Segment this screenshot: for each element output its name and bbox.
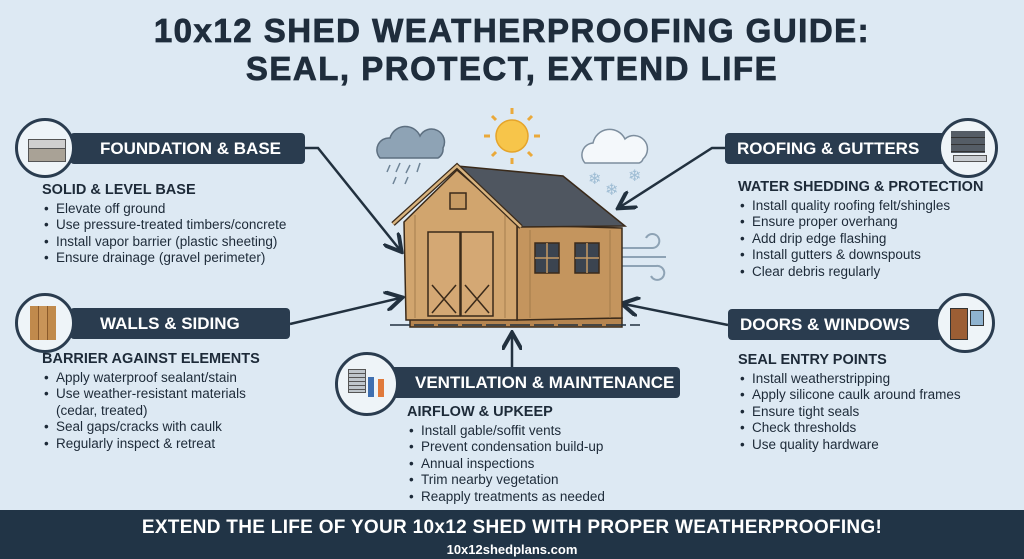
panel: foundation & base (15, 118, 305, 265)
text: ventilation bullets: Install gable/soffit vents (421, 423, 561, 438)
icon: wood and brush (15, 293, 75, 353)
footer: EXTEND THE LIFE OF YOUR 10x12 SHED WITH PROPER WEATHERPROOFING! (142, 517, 882, 538)
banner: foundation: FOUNDATION & BASE (100, 139, 281, 158)
title: 10x12 SHED WEATHERPROOFING GUIDE: (154, 12, 870, 49)
text: walls bullets: Regularly inspect & retreat (56, 436, 215, 451)
text: doors bullets: Check thresholds (752, 420, 856, 435)
text: foundation bullets: Ensure drainage (gravel perimeter) (56, 250, 265, 265)
text: foundation bullets: Elevate off ground (56, 201, 165, 216)
title (154, 12, 870, 87)
text: walls bullets: (cedar, treated) (56, 403, 148, 418)
arrows (290, 148, 728, 367)
text: roofing bullets: Ensure proper overhang (752, 214, 898, 229)
text: roofing bullets: Install gutters & downspouts (752, 247, 921, 262)
banner: ventilation (385, 367, 680, 398)
icon: door (935, 293, 995, 353)
banner: walls (70, 308, 290, 339)
icon: rain cloud (377, 126, 444, 184)
text: walls bullets: BARRIER AGAINST ELEMENTS (42, 351, 260, 367)
panel: walls & siding (15, 293, 290, 451)
panel: doors & windows (728, 293, 995, 452)
text: doors bullets: Ensure tight seals (752, 404, 859, 419)
text: doors bullets: SEAL ENTRY POINTS (738, 352, 887, 368)
icon: snow cloud: ❄ (588, 171, 601, 188)
text: roofing bullets (738, 179, 983, 279)
icon: snow cloud: ❄ (605, 182, 618, 199)
banner: walls: WALLS & SIDING (100, 314, 240, 333)
footer (0, 510, 1024, 559)
banner: roofing (725, 133, 955, 164)
banner: ventilation: VENTILATION & MAINTENANCE (415, 373, 674, 392)
banner: foundation (70, 133, 305, 164)
text: walls bullets: Seal gaps/cracks with caulk (56, 419, 222, 434)
text: walls bullets (42, 351, 260, 451)
icon: concrete slab (15, 118, 75, 178)
text: walls bullets: Apply waterproof sealant/stain (56, 370, 237, 385)
text: ventilation bullets (407, 404, 605, 504)
icon: shingles (938, 118, 998, 178)
text: walls bullets: Use weather-resistant materials (56, 386, 246, 401)
text: foundation bullets: Install vapor barrier (plastic sheeting) (56, 234, 277, 249)
shed (393, 166, 625, 327)
text: ventilation bullets: Reapply treatments as needed (421, 489, 605, 504)
banner: doors: DOORS & WINDOWS (740, 315, 910, 334)
panel: ventilation & maintenance (335, 352, 680, 504)
icon: wind (618, 234, 666, 280)
text: ventilation bullets: Prevent condensation build-up (421, 439, 603, 454)
text: roofing bullets: Install quality roofing felt/shingles (752, 198, 950, 213)
text: roofing bullets: Add drip edge flashing (752, 231, 886, 246)
text: doors bullets: Use quality hardware (752, 437, 879, 452)
text: roofing bullets: WATER SHEDDING & PROTECTION (738, 179, 983, 195)
icon: vent and tools (335, 352, 399, 416)
text: ventilation bullets: AIRFLOW & UPKEEP (407, 404, 553, 420)
text: roofing bullets: Clear debris regularly (752, 264, 880, 279)
banner: roofing: ROOFING & GUTTERS (737, 139, 919, 158)
banner: doors (728, 309, 943, 340)
text: foundation bullets (42, 182, 286, 265)
text: foundation bullets: SOLID & LEVEL BASE (42, 182, 196, 198)
text: doors bullets (738, 352, 961, 452)
text: foundation bullets: Use pressure-treated timbers/concrete (56, 217, 286, 232)
text: ventilation bullets: Annual inspections (421, 456, 534, 471)
icon: sun (484, 108, 540, 164)
panel: roofing & gutters (725, 118, 998, 279)
footer: 10x12shedplans.com (447, 542, 577, 557)
text: doors bullets: Apply silicone caulk around frames (752, 387, 961, 402)
icon: snow cloud (582, 129, 647, 199)
text: doors bullets: Install weatherstripping (752, 371, 890, 386)
title: SEAL, PROTECT, EXTEND LIFE (246, 50, 778, 87)
icon: snow cloud: ❄ (628, 168, 641, 185)
text: ventilation bullets: Trim nearby vegetation (421, 472, 559, 487)
